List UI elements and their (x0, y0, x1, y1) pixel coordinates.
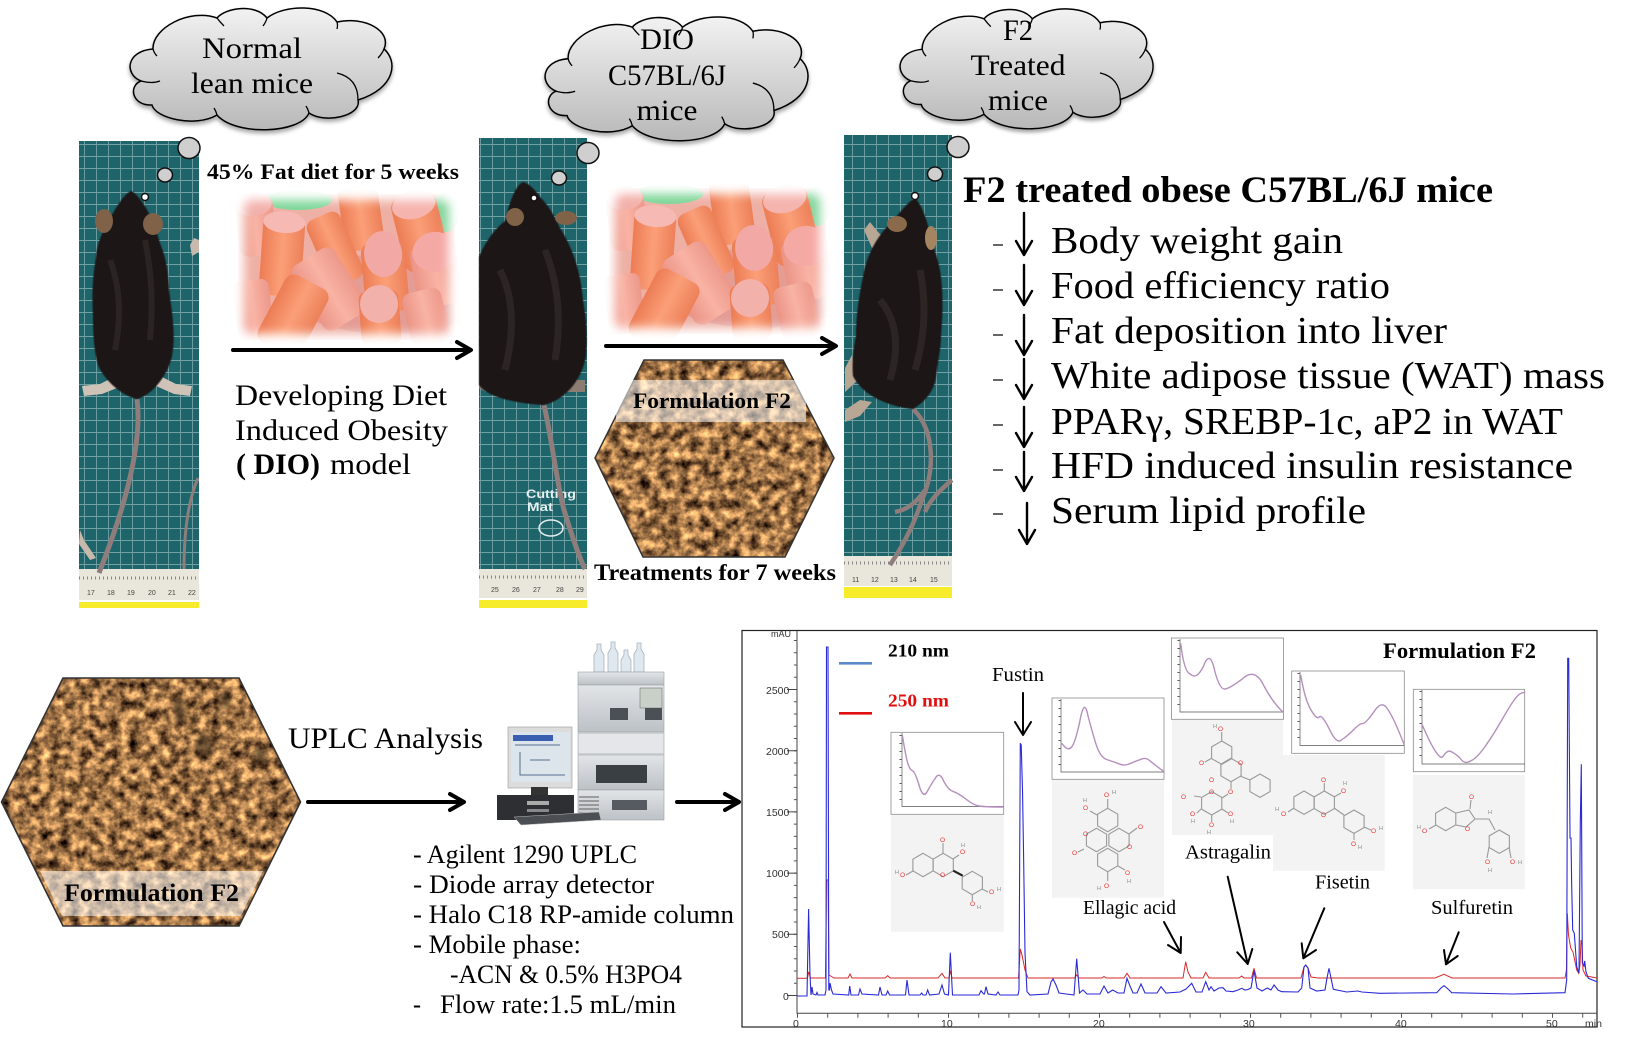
inset: sulfuretin spectrum and structure: H (1488, 810, 1492, 816)
axes: 500 (772, 929, 790, 941)
inset: astragalin spectrum and structure: O (1199, 760, 1204, 767)
axes: 1000 (766, 868, 790, 880)
hexagon: formulation F2 (treatment): Formulation F2 (633, 388, 791, 413)
photo: normal lean mouse: 18 (107, 590, 115, 597)
photo: DIO obese mouse (479, 138, 587, 608)
callout: fisetin (1302, 872, 1370, 958)
callout: fisetin: Fisetin (1315, 872, 1370, 894)
inset: sulfuretin spectrum and structure: O (1465, 826, 1470, 833)
legend (839, 641, 949, 713)
inset: astragalin spectrum and structure: O (1209, 822, 1214, 829)
inset: ellagic acid spectrum and structure: O (1125, 870, 1130, 877)
hexagon: formulation F2 (treatment) (595, 360, 834, 557)
inset: fustin spectrum and structure: O (960, 849, 965, 856)
inset: fisetin spectrum and structure: O (1321, 777, 1326, 784)
text: developing DIO model (235, 379, 448, 481)
legend: 210 nm (888, 641, 949, 661)
photo: DIO obese mouse: 26 (512, 587, 520, 594)
label: 45% fat diet: 45% Fat diet for 5 weeks (207, 159, 459, 184)
inset: astragalin spectrum and structure: O (1238, 760, 1243, 767)
arrow: lean to DIO (233, 342, 471, 358)
inset: sulfuretin spectrum and structure: O (1485, 859, 1490, 866)
inset: astragalin spectrum and structure: H (1213, 724, 1217, 730)
inset: astragalin spectrum and structure: H (1191, 819, 1195, 825)
item: food efficiency ratio: Food efficiency ratio (1051, 265, 1390, 307)
photo: normal lean mouse: 21 (168, 590, 176, 597)
axes: 2000 (766, 746, 790, 758)
inset: fisetin spectrum and structure: H (1275, 807, 1279, 813)
inset: fustin spectrum and structure: O (989, 889, 994, 896)
inset: sulfuretin spectrum and structure: O (1469, 794, 1474, 801)
item: body weight gain: Body weight gain (1051, 220, 1343, 262)
axes: 20 (1093, 1018, 1105, 1030)
item: PPAR gamma: PPARγ, SREBP-1c, aP2 in WAT (1051, 401, 1563, 443)
inset: fisetin spectrum and structure: H (1358, 845, 1362, 851)
inset: fustin spectrum and structure (891, 732, 1004, 932)
inset: ellagic acid spectrum and structure: H (1097, 886, 1101, 892)
photo: F2 treated mouse (844, 135, 952, 598)
photo: normal lean mouse: 17 (87, 590, 95, 597)
item: body weight gain (993, 213, 1343, 262)
inset: ellagic acid spectrum and structure: H (1127, 879, 1131, 885)
cloud: DIO C57BL/6J mice: mice (636, 94, 698, 127)
photo: DIO obese mouse: 27 (533, 587, 541, 594)
photo: F2 treated mouse: 12 (871, 577, 879, 584)
item: fat deposition: Fat deposition into liver (1051, 310, 1447, 352)
axes: min (1585, 1018, 1602, 1030)
cloud: F2 treated mice: Treated (970, 49, 1066, 82)
inset: ellagic acid spectrum and structure: H (1083, 798, 1087, 804)
bottles (594, 642, 644, 672)
text: UPLC conditions: - Agilent 1290 UPLC (413, 840, 637, 869)
photo: normal lean mouse: 20 (148, 590, 156, 597)
arrow: UPLC to chromatogram (677, 794, 739, 810)
inset: fustin spectrum and structure: O (940, 837, 945, 844)
callout: sulfuretin (1431, 897, 1513, 964)
inset: ellagic acid spectrum and structure: O (1138, 824, 1143, 831)
inset: sulfuretin spectrum and structure: H (1417, 825, 1421, 831)
inset: sulfuretin spectrum and structure: H (1488, 868, 1492, 874)
inset: astragalin spectrum and structure: O (1228, 789, 1233, 796)
inset: astragalin spectrum and structure: O (1228, 811, 1233, 818)
text: UPLC conditions: - Halo C18 RP-amide column (413, 900, 734, 929)
inset: fustin spectrum and structure: O (940, 872, 945, 879)
callout: astragalin (1172, 835, 1273, 964)
inset: fustin spectrum and structure: H (961, 843, 965, 849)
inset: ellagic acid spectrum and structure: O (1127, 844, 1132, 851)
callout: fustin (992, 664, 1044, 735)
inset: fisetin spectrum and structure: O (1281, 811, 1286, 818)
inset: ellagic acid spectrum and structure: O (1072, 850, 1077, 857)
photo: F2 treated mouse: 14 (909, 577, 917, 584)
photo: DIO obese mouse: Mat (527, 500, 553, 514)
inset: sulfuretin spectrum and structure: O (1422, 828, 1427, 835)
monitor (508, 727, 572, 788)
text: developing DIO model: Induced Obesity (235, 414, 448, 447)
trace: 250 nm red (797, 880, 1597, 978)
text: UPLC conditions: - (413, 990, 421, 1019)
photo: DIO obese mouse: 28 (556, 587, 564, 594)
image: diet pellets (treatment) (608, 186, 827, 336)
hexagon: formulation F2 (large): Formulation F2 (64, 880, 239, 907)
label: treatments for 7 weeks: Treatments for 7 weeks (594, 560, 836, 585)
inset: fustin spectrum and structure: H (895, 870, 899, 876)
inset: astragalin spectrum and structure (1172, 638, 1284, 836)
inset: fisetin spectrum and structure: H (1379, 826, 1383, 832)
inset: astragalin spectrum and structure: O (1181, 794, 1186, 801)
item: serum lipid profile: Serum lipid profile (1051, 490, 1366, 532)
inset: sulfuretin spectrum and structure: O (1510, 859, 1515, 866)
item: serum lipid profile (993, 490, 1366, 544)
legend: 250 nm (888, 691, 949, 711)
inset: ellagic acid spectrum and structure: O (1083, 831, 1088, 838)
computer and keyboard (497, 795, 574, 820)
inset: fisetin spectrum and structure: O (1351, 841, 1356, 848)
thought bubbles: F2 mouse (912, 136, 969, 200)
inset: astragalin spectrum and structure: O (1218, 726, 1223, 733)
thought bubbles: DIO mouse (531, 142, 599, 201)
inset: fisetin spectrum and structure (1273, 671, 1404, 871)
photo: DIO obese mouse: 29 (576, 587, 584, 594)
inset: ellagic acid spectrum and structure (1052, 698, 1164, 898)
photo: normal lean mouse (79, 141, 199, 608)
callout: fustin: Fustin (992, 664, 1044, 686)
callout: astragalin: Astragalin (1185, 842, 1271, 864)
inset: fustin spectrum and structure: H (997, 887, 1001, 893)
photo: F2 treated mouse: 15 (930, 577, 938, 584)
axes: 0 (783, 991, 789, 1003)
callout: ellagic acid: Ellagic acid (1083, 897, 1176, 919)
axes: 50 (1546, 1018, 1558, 1030)
text: UPLC conditions (413, 840, 734, 1019)
cloud: DIO C57BL/6J mice (545, 17, 808, 141)
inset: astragalin spectrum and structure: H (1230, 819, 1234, 825)
trace: 210 nm blue (797, 647, 1597, 996)
text: developing DIO model: Developing Diet (235, 379, 448, 412)
cloud: normal lean mice: lean mice (191, 67, 313, 100)
inset: astragalin spectrum and structure: H (1207, 830, 1211, 836)
axes: mAU (771, 629, 791, 639)
inset: ellagic acid spectrum and structure: H (1112, 790, 1116, 796)
arrow: powder to UPLC (308, 794, 464, 810)
text: UPLC conditions: - Mobile phase: (413, 930, 581, 959)
inset: astragalin spectrum and structure: O (1209, 777, 1214, 784)
axes: 0 (793, 1018, 799, 1030)
inset: fisetin spectrum and structure: O (1321, 812, 1326, 819)
chart title: Formulation F2 (1383, 638, 1536, 663)
axes: 10 (941, 1018, 953, 1030)
inset: fustin spectrum and structure: H (977, 905, 981, 911)
cloud: DIO C57BL/6J mice: DIO (640, 23, 694, 56)
text: developing DIO model: ( DIO) (236, 448, 320, 481)
item: WAT mass: White adipose tissue (WAT) mass (1051, 355, 1605, 397)
photo: F2 treated mouse: 13 (890, 577, 898, 584)
inset: ellagic acid spectrum and structure: O (1104, 792, 1109, 799)
inset: fustin spectrum and structure: O (900, 872, 905, 879)
inset: fisetin spectrum and structure: H (1343, 781, 1347, 787)
inset: fustin spectrum and structure: O (970, 901, 975, 908)
inset: fisetin spectrum and structure: O (1341, 788, 1346, 795)
axes (766, 629, 1602, 1030)
photo: normal lean mouse: 19 (127, 590, 135, 597)
axes: 30 (1243, 1018, 1255, 1030)
callout: sulfuretin: Sulfuretin (1431, 897, 1513, 919)
inset: astragalin spectrum and structure: O (1190, 811, 1195, 818)
axes: 1500 (766, 807, 790, 819)
inset: fisetin spectrum and structure: O (1371, 828, 1376, 835)
axes: 40 (1395, 1018, 1407, 1030)
heading: F2 treated obese mice: F2 treated obese C57BL/6J mice (963, 170, 1493, 211)
cloud: normal lean mice: Normal (202, 32, 302, 65)
text: developing DIO model: model (330, 448, 411, 481)
results list (993, 213, 1605, 544)
inset: astragalin spectrum and structure: O (1209, 789, 1214, 796)
text: UPLC conditions: Flow rate:1.5 mL/min (440, 990, 676, 1019)
thought bubbles: lean mouse (142, 138, 200, 200)
cloud: F2 treated mice: F2 (1003, 14, 1033, 47)
inset: ellagic acid spectrum and structure: O (1083, 805, 1088, 812)
arrow: DIO to F2 treated (606, 338, 836, 354)
hexagon: formulation F2 (large) (2, 678, 300, 926)
image: high fat diet pellets (237, 192, 456, 342)
photo: DIO obese mouse: 25 (491, 587, 499, 594)
axes: 2500 (766, 685, 790, 697)
inset: ellagic acid spectrum and structure: O (1104, 883, 1109, 890)
callout: ellagic acid (1083, 897, 1181, 953)
photo: F2 treated mouse: 11 (852, 577, 859, 584)
text: UPLC conditions: - Diode array detector (413, 870, 654, 899)
inset: sulfuretin spectrum and structure: H (1518, 860, 1522, 866)
text: UPLC conditions: -ACN & 0.5% H3PO4 (450, 960, 682, 989)
icon: UPLC instrument (497, 642, 664, 825)
label: UPLC analysis: UPLC Analysis (288, 722, 483, 755)
item: insulin resistance: HFD induced insulin resistance (1051, 445, 1573, 487)
cloud: F2 treated mice: mice (988, 84, 1048, 117)
photo: normal lean mouse: 22 (188, 590, 196, 597)
module stack (578, 672, 664, 820)
chart: UPLC chromatogram (742, 629, 1602, 1030)
inset: sulfuretin spectrum and structure (1413, 689, 1525, 889)
cloud: normal lean mice (130, 8, 392, 130)
cloud: DIO C57BL/6J mice: C57BL/6J (608, 59, 726, 92)
cloud: F2 treated mice (900, 9, 1153, 129)
photo: DIO obese mouse: Cutting (526, 487, 576, 501)
